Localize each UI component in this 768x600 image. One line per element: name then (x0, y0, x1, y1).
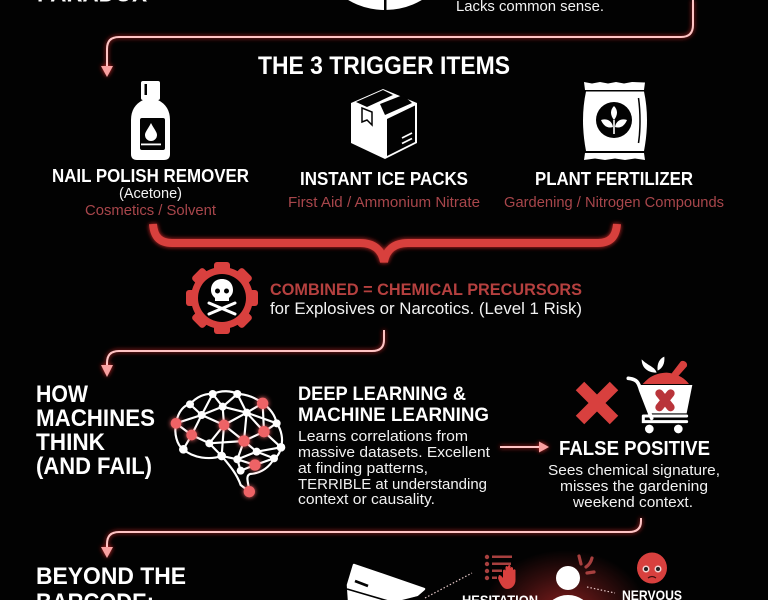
icon: nervous face (637, 552, 667, 584)
label: cosmetics / solvent: Cosmetics / Solvent (85, 203, 216, 219)
icon: bottle (131, 81, 170, 160)
arrow: to false positive (500, 442, 549, 452)
icon: gear with skull (186, 262, 258, 334)
text: false positive: Sees chemical signature, (548, 462, 720, 479)
heading: how machines think (36, 381, 155, 480)
panel: instant ice packs (288, 89, 480, 211)
subheading: MACHINE LEARNING (298, 404, 489, 426)
heading: how machines think: HOW (36, 381, 88, 408)
label: first aid / ammonium nitrate: First Aid / Ammonium Nitrate (288, 195, 480, 211)
panel: nail polish remover (52, 81, 249, 219)
heading: the 3 trigger items: THE 3 TRIGGER ITEMS (258, 52, 510, 80)
panel: plant fertilizer (504, 82, 724, 211)
text: deep learning and machine learning (298, 383, 491, 508)
body (298, 428, 491, 508)
icon: neural brain (171, 390, 285, 497)
subheading: DEEP LEARNING & (298, 383, 466, 405)
brace: combining the items (153, 224, 617, 262)
icon: box (351, 89, 417, 159)
label: gardening / nitrogen compounds: Gardening / Nitrogen Compounds (504, 195, 724, 211)
icon: red x (580, 386, 614, 420)
body: TERRIBLE at understanding (298, 476, 487, 493)
text: false positive: FALSE POSITIVE (559, 438, 710, 460)
subheading (298, 383, 489, 426)
text: false positive (548, 438, 720, 511)
icon: nervous person (547, 556, 594, 600)
dotted line: camera to hesitation (425, 573, 472, 598)
text: false positive: weekend context. (572, 494, 693, 511)
body: at finding patterns, (298, 460, 428, 477)
body: Learns correlations from (298, 428, 468, 445)
callout body: for Explosives or Narcotics. (Level 1 Risk) (270, 300, 582, 318)
icon: security camera (347, 565, 424, 600)
icon: circle (cropped) (312, 0, 458, 11)
label: instant ice packs: INSTANT ICE PACKS (300, 169, 468, 189)
label: plant fertilizer: PLANT FERTILIZER (535, 169, 693, 189)
arrow: combined to machines (101, 330, 384, 377)
body: massive datasets. Excellent (298, 444, 491, 461)
arrow: paradox to trigger items (101, 0, 693, 77)
callout: combined chemical precursors (270, 280, 582, 318)
icon: hesitation list and hand (485, 555, 516, 589)
label: acetone: (Acetone) (119, 186, 182, 202)
icon: glow behind person (483, 550, 647, 600)
arrow: false positive to beyond the barcode (101, 518, 641, 558)
callout heading: COMBINED = CHEMICAL PRECURSORS (270, 280, 582, 299)
label: nail polish remover: NAIL POLISH REMOVER (52, 166, 249, 186)
icon: shopping cart (628, 357, 692, 433)
heading: beyond the barcode: BEYOND THE (36, 563, 186, 590)
dotted line: person to nervous (587, 587, 615, 593)
body: context or causality. (298, 491, 435, 508)
heading: how machines think: THINK (36, 429, 106, 456)
icon: fertilizer bag (583, 82, 647, 160)
heading: how machines think: (AND FAIL) (36, 453, 152, 480)
text: false positive: misses the gardening (560, 478, 708, 495)
heading: how machines think: MACHINES (36, 405, 155, 432)
